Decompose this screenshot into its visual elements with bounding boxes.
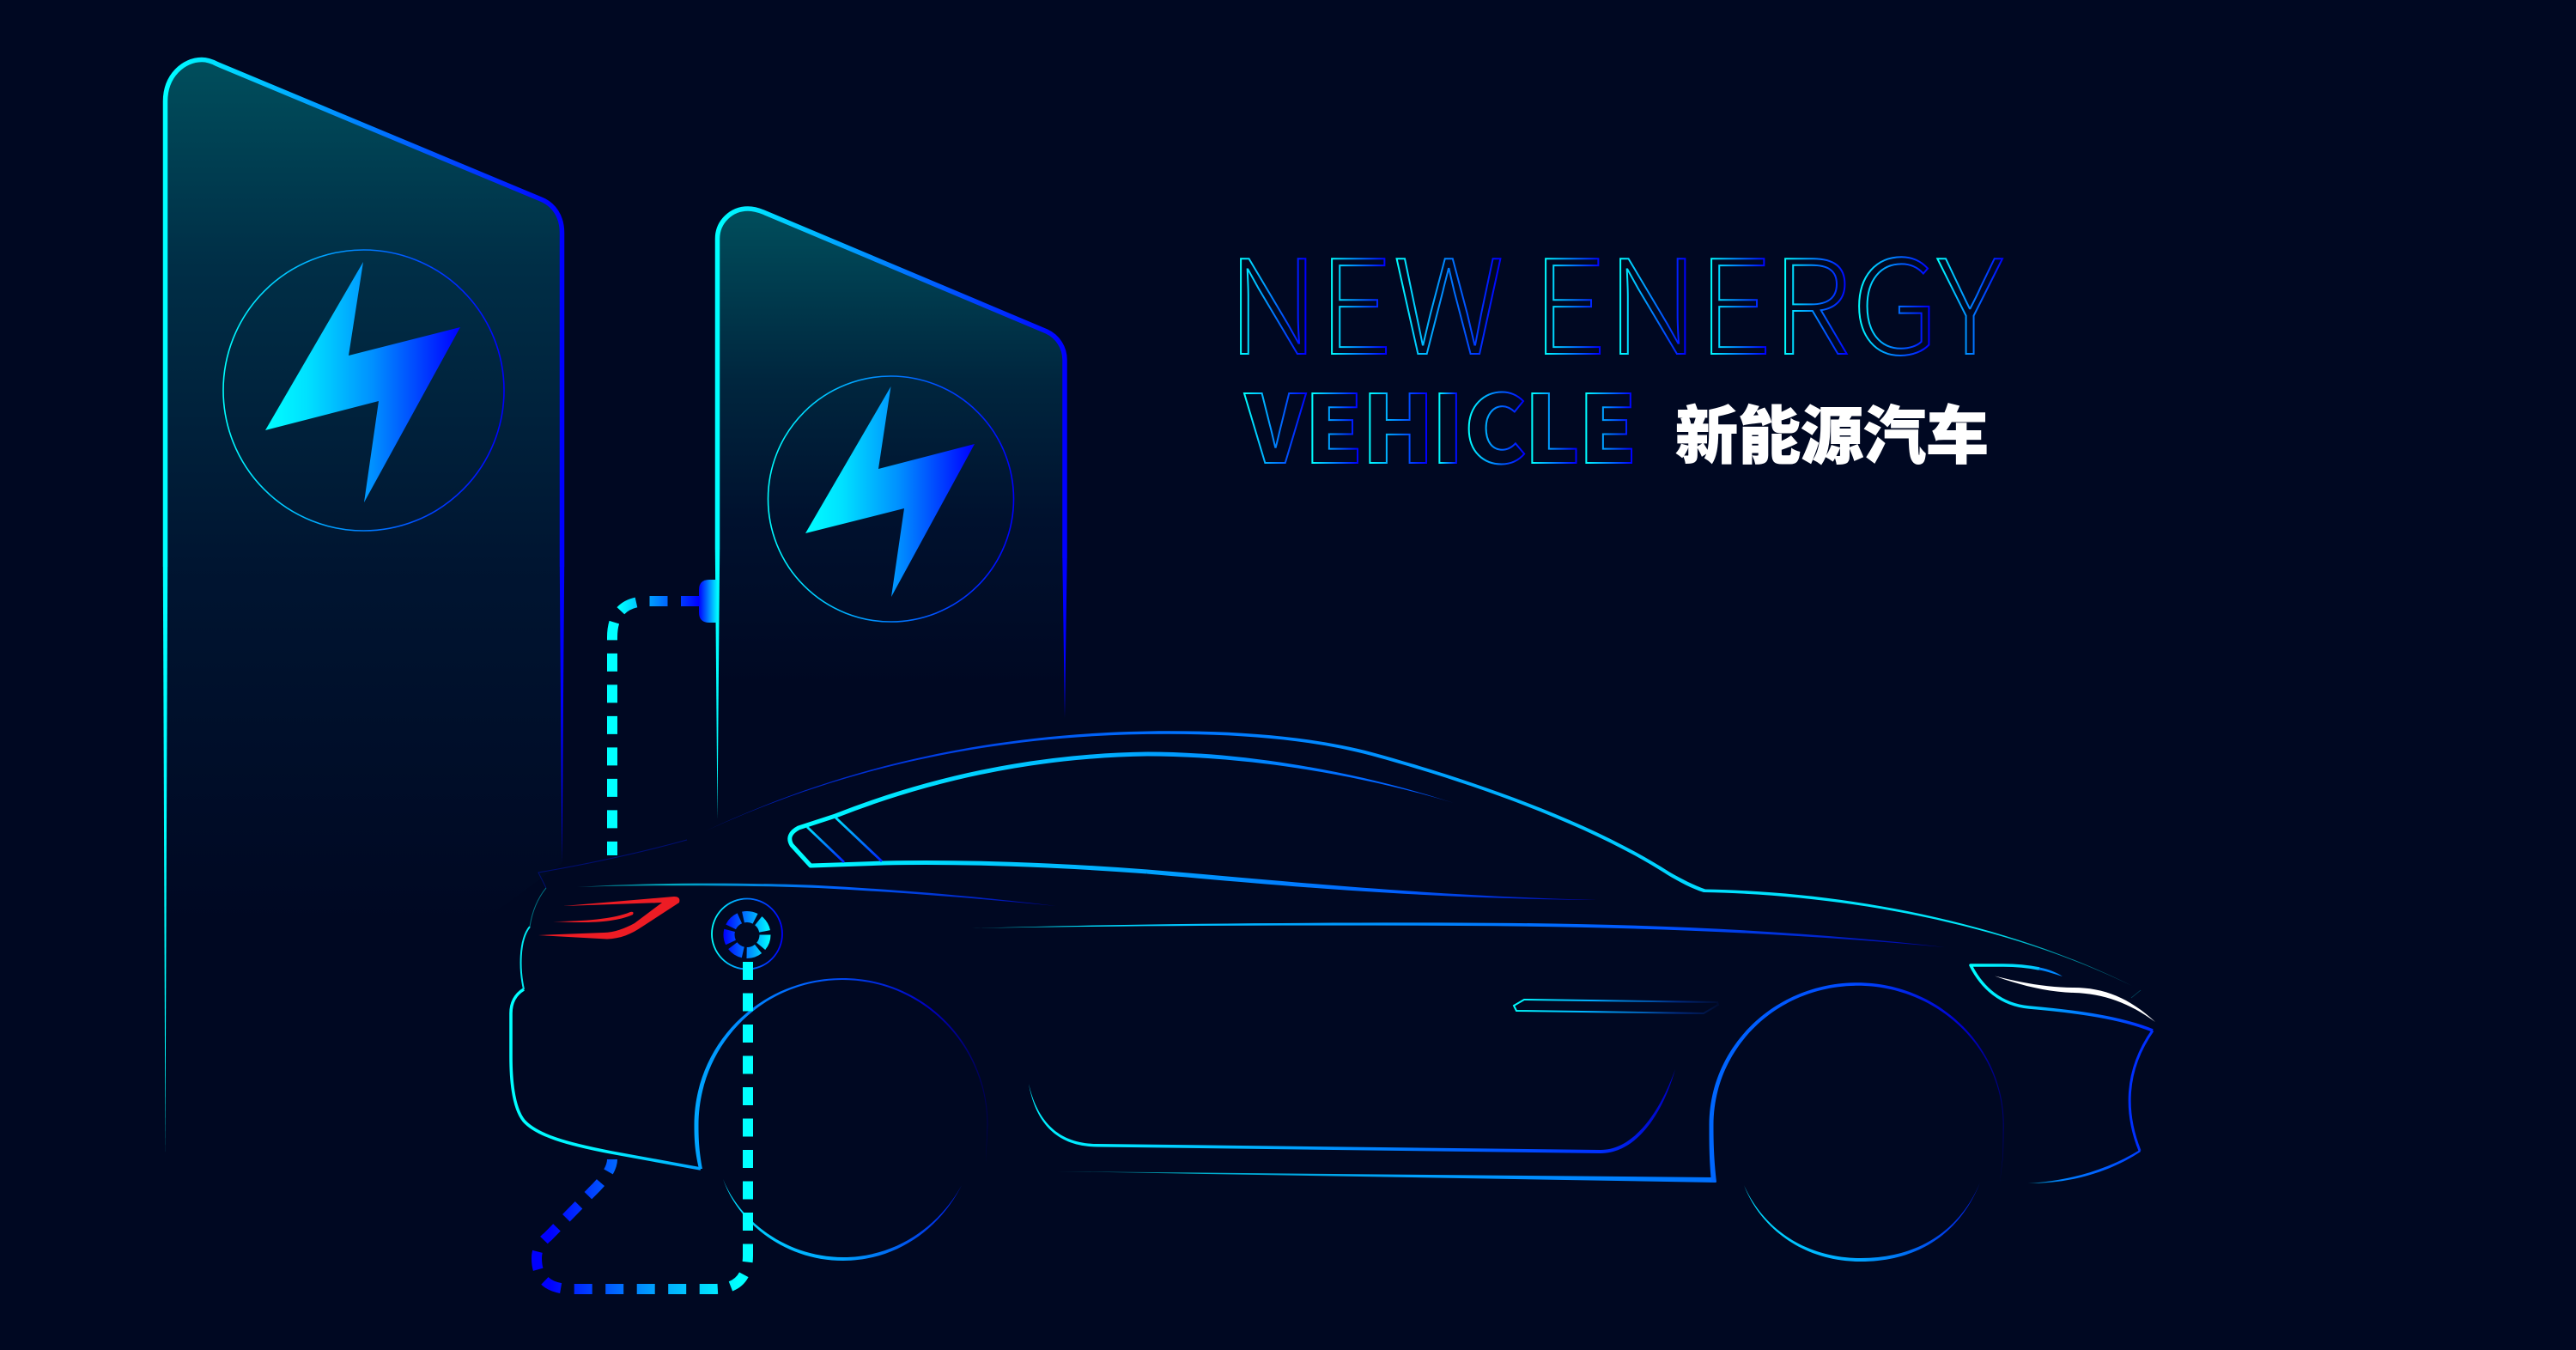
cable dashes: [612, 601, 699, 855]
car: door bottom line: [1029, 1069, 1675, 1153]
car: sill line: [1056, 1171, 1716, 1183]
car: side window: [790, 752, 1597, 900]
title: Chinese subtitle: 新能源汽车: [1675, 402, 1989, 471]
charging cable: port to ground: [537, 962, 748, 1289]
car: headlight: [1971, 965, 2155, 1031]
title: VEHICLE: I: [1431, 356, 1464, 490]
icon: lightning bolt: [265, 262, 460, 502]
title: NEW ENERGY: W: [1393, 203, 1504, 392]
title: NEW ENERGY: E: [1318, 203, 1393, 392]
title: NEW ENERGY: G: [1851, 203, 1939, 392]
title: VEHICLE: C: [1464, 356, 1527, 490]
station body gradient: [718, 209, 1065, 819]
icon: circle ring: [223, 250, 504, 531]
car: rear bumper: [511, 888, 701, 1169]
title: VEHICLE: L: [1524, 356, 1580, 490]
car: shoulder line: [577, 884, 1056, 906]
icon: lightning bolt: [805, 386, 975, 597]
car outline: [511, 731, 2155, 1262]
charging cable: station to car: [612, 580, 718, 855]
cable plug: [699, 580, 718, 623]
car: rear wheel lower arc: [723, 1179, 962, 1261]
panel: small charging station: [715, 209, 1067, 819]
car: front bumper: [2028, 990, 2153, 1183]
car: front wheel arch: [1709, 982, 2004, 1183]
title: VEHICLE: V: [1244, 356, 1307, 490]
car: side crease line: [972, 922, 1945, 947]
car: red tail light: [538, 897, 679, 940]
car: charging port: [712, 898, 782, 969]
car: rear deck thin line: [538, 840, 687, 888]
station outline: [163, 60, 564, 1155]
station outline: [715, 209, 1067, 819]
title: VEHICLE: H: [1362, 356, 1434, 490]
title: NEW ENERGY: R: [1771, 203, 1850, 392]
title: NEW ENERGY: Y: [1937, 203, 2002, 392]
title: VEHICLE: E: [1578, 356, 1637, 490]
car: front wheel lower arc: [1744, 1183, 1980, 1262]
station body gradient: [165, 60, 562, 1155]
panel: large charging station: [163, 60, 564, 1155]
title: NEW ENERGY: E: [1698, 203, 1772, 392]
car: roof and hood line: [687, 731, 2141, 990]
car: door handle: [1514, 1000, 1718, 1013]
car: rear wheel arch: [694, 978, 987, 1169]
icon: circle ring: [768, 376, 1013, 622]
title: VEHICLE: E: [1304, 356, 1364, 490]
title: NEW ENERGY: E: [1532, 203, 1607, 392]
title: NEW ENERGY: N: [1607, 203, 1698, 392]
title: NEW ENERGY: N: [1227, 203, 1319, 392]
